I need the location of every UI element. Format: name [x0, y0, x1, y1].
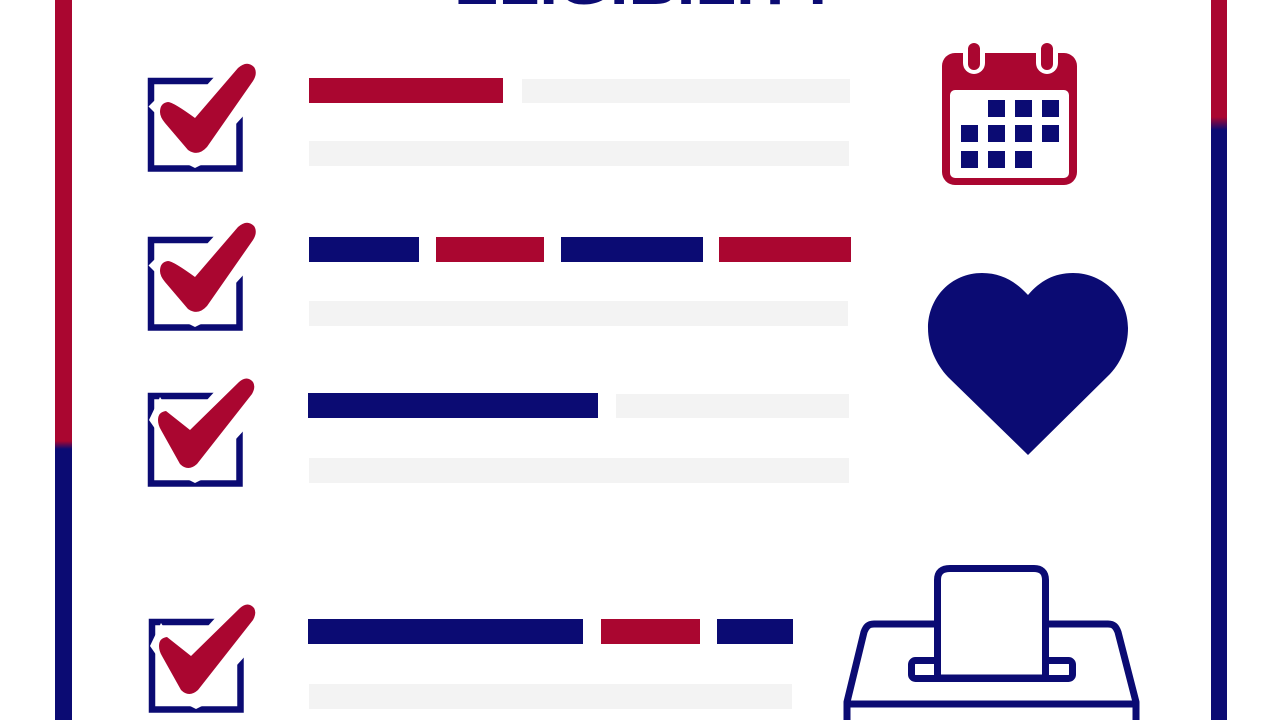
icon: calendar	[942, 38, 1077, 185]
icon: heart	[928, 273, 1128, 455]
icon: checkbox 4	[150, 604, 255, 710]
icon: checkbox 2	[148, 223, 256, 328]
right border	[1211, 0, 1227, 720]
left border	[55, 0, 72, 720]
bars row 2	[309, 237, 851, 326]
bars row 3	[308, 393, 849, 483]
icon: checkbox 1	[148, 64, 256, 168]
bars row 4	[308, 619, 793, 709]
checklist row 3	[149, 378, 849, 484]
checklist row 2	[148, 223, 851, 328]
bars row 1	[309, 78, 850, 166]
checklist row 4	[150, 604, 793, 710]
checklist row 1	[148, 64, 850, 168]
icon: ballot box	[847, 568, 1136, 720]
icon: checkbox 3	[149, 378, 254, 484]
